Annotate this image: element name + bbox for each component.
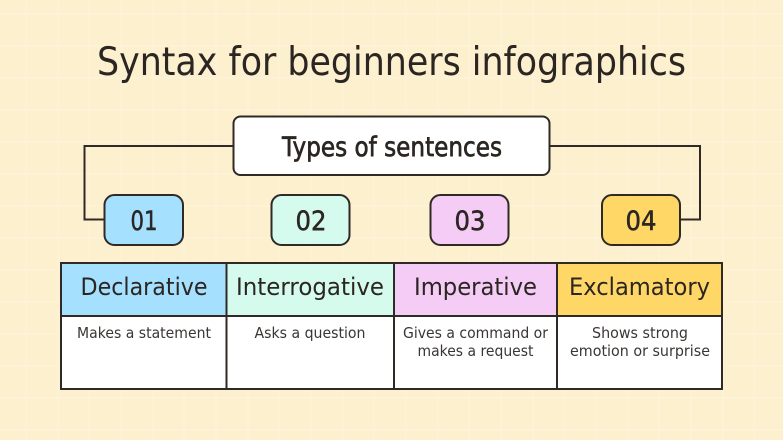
column: imperative: Gives a command or <box>403 324 549 342</box>
number badge 01 <box>104 195 183 245</box>
left connector arrow <box>84 146 233 220</box>
column: interrogative <box>226 263 394 389</box>
right connector arrow <box>550 146 700 220</box>
title: Syntax for beginners infographics <box>97 40 686 85</box>
heading box: types of sentences: Types of sentences <box>281 132 502 163</box>
column: exclamatory: emotion or surprise <box>570 342 710 360</box>
number badge 04: 04 <box>626 206 656 237</box>
number badge 02: 02 <box>296 206 326 237</box>
table of sentence types <box>61 263 722 389</box>
number badge 02 <box>272 195 350 245</box>
column: exclamatory: Exclamatory <box>569 273 710 301</box>
number badge 01: 01 <box>130 206 158 237</box>
column: declarative: Makes a statement <box>77 324 211 342</box>
column: interrogative: Interrogative <box>236 273 384 301</box>
number badge 03 <box>430 195 508 245</box>
number badge 03: 03 <box>454 206 486 237</box>
number badge 04 <box>602 195 680 245</box>
column: declarative <box>61 263 226 389</box>
column: exclamatory: Shows strong <box>592 324 688 342</box>
column: imperative <box>394 263 557 389</box>
column: imperative: makes a request <box>418 342 534 360</box>
column: interrogative: Asks a question <box>254 324 366 342</box>
column: exclamatory <box>557 263 722 389</box>
column: imperative: Imperative <box>414 273 537 301</box>
column: declarative: Declarative <box>80 273 208 301</box>
heading box: types of sentences <box>234 116 550 175</box>
